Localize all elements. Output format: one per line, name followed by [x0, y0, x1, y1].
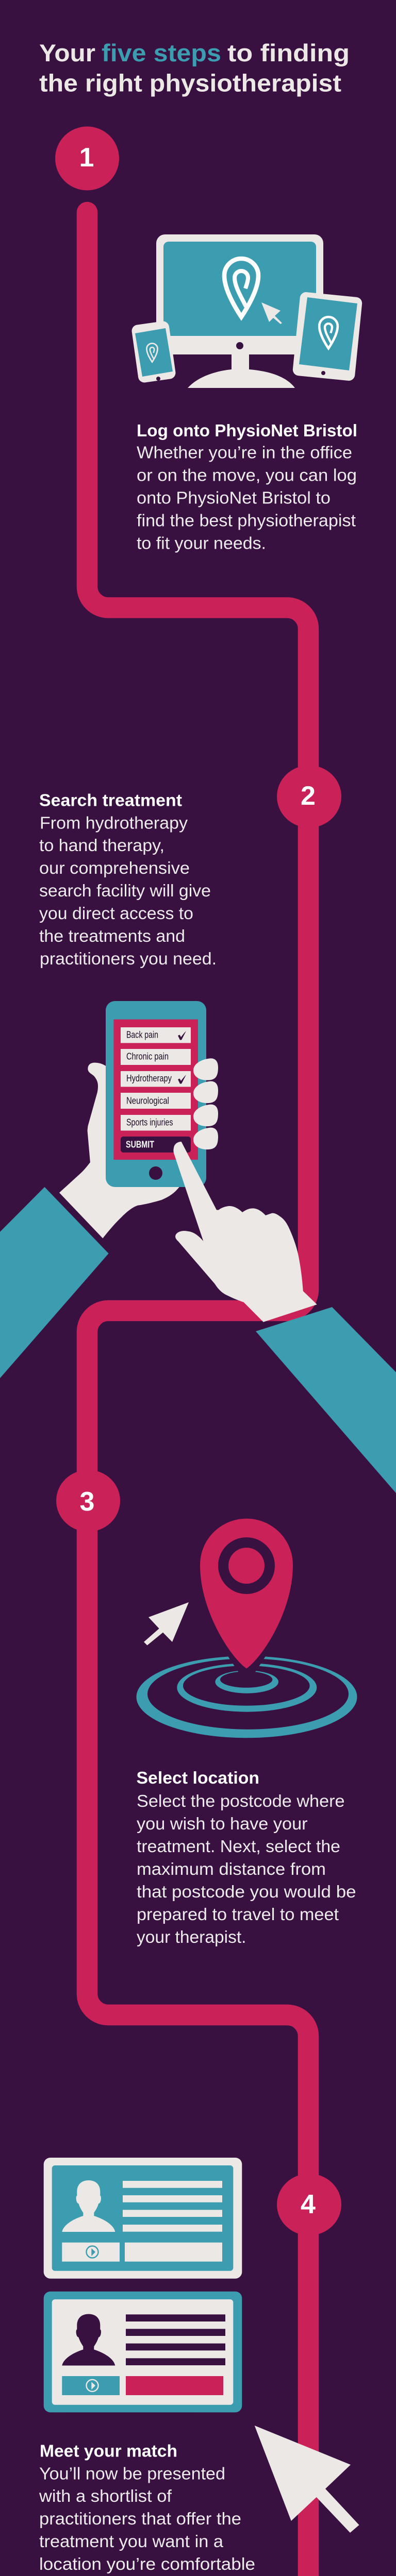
- icon: location pin: [200, 1519, 293, 1669]
- text block: search treatment: From hydrotherapy: [40, 813, 188, 832]
- text block: meet your match: practitioners that offer the: [39, 2509, 241, 2528]
- icon: practitioner card, unselected: [44, 2158, 242, 2279]
- step 2 number badge: [277, 766, 341, 827]
- title: five steps: [102, 39, 221, 66]
- text block: meet your match: You’ll now be presented: [39, 2464, 225, 2483]
- icon: monitor, tablet and phone showing the location pin: [131, 234, 362, 388]
- icon: phone with search form: Back pain: [126, 1030, 158, 1040]
- text block: search treatment: our comprehensive: [39, 858, 190, 877]
- timeline path connecting the steps: [87, 212, 308, 2576]
- title: to finding: [227, 39, 350, 66]
- icon: phone with search form: Neurological: [126, 1095, 169, 1106]
- text block: log onto PhysioNet Bristol: or on the move, you can log: [137, 466, 357, 485]
- panel: step 1: [55, 127, 362, 553]
- icon: phone with search form: [106, 1001, 206, 1187]
- text block: select location: prepared to travel to meet: [137, 1905, 339, 1924]
- text block: select location: that postcode you would be: [137, 1882, 356, 1901]
- text block: select location: [136, 1768, 356, 1946]
- title: the right physiotherapist: [39, 69, 341, 97]
- text block: meet your match: treatment you want in a: [39, 2532, 224, 2551]
- icon: right sleeve: [256, 1307, 396, 1493]
- icon: right hand pointing at submit: [173, 1142, 317, 1322]
- step 2 number badge: 2: [301, 781, 316, 811]
- panel: step 3: [56, 1470, 357, 1946]
- text block: select location: your therapist.: [137, 1927, 246, 1946]
- text block: log onto PhysioNet Bristol: Log onto PhysioNet Bristol: [137, 421, 357, 440]
- title: [39, 39, 350, 97]
- text block: meet your match: [39, 2441, 255, 2576]
- step 4 number badge: 4: [301, 2190, 316, 2219]
- icon: phone with search form: SUBMIT: [126, 1140, 154, 1150]
- icon: left sleeve: [0, 1187, 109, 1378]
- text block: select location: you wish to have your: [137, 1814, 308, 1833]
- step 1 number badge: [55, 127, 119, 191]
- icon: large cursor arrow: [255, 2426, 359, 2533]
- text block: meet your match: Meet your match: [40, 2441, 177, 2461]
- panel: step 4: [39, 2158, 359, 2576]
- text block: search treatment: search facility will give: [39, 881, 211, 900]
- icon: target rings under pin: [136, 1646, 357, 1738]
- text block: search treatment: you direct access to: [39, 904, 193, 923]
- step 4 number badge: [277, 2174, 341, 2235]
- icon: cursor arrow: [144, 1602, 189, 1646]
- icon: phone with search form: Hydrotherapy: [126, 1073, 172, 1083]
- text block: log onto PhysioNet Bristol: onto PhysioNet Bristol to: [137, 488, 331, 507]
- text block: select location: Select the postcode where: [137, 1791, 345, 1810]
- text block: search treatment: practitioners you need.: [40, 949, 217, 968]
- text block: select location: maximum distance from: [137, 1859, 326, 1878]
- icon: phone with search form: Chronic pain: [126, 1052, 169, 1062]
- step 3 number badge: [56, 1470, 120, 1532]
- icon: left hand holding phone: [59, 1063, 180, 1239]
- text block: select location: treatment. Next, select the: [137, 1837, 340, 1856]
- icon: phone with search form: Sports injuries: [126, 1117, 173, 1127]
- text block: log onto PhysioNet Bristol: to fit your needs.: [137, 534, 266, 553]
- text block: meet your match: with a shortlist of: [39, 2486, 172, 2505]
- text block: log onto PhysioNet Bristol: find the best physiotherapist: [137, 511, 356, 530]
- text block: search treatment: [39, 790, 217, 968]
- text block: select location: Select location: [136, 1768, 259, 1787]
- text block: search treatment: to hand therapy,: [39, 836, 164, 855]
- step 1 number badge: 1: [79, 143, 94, 173]
- panel: step 2: [0, 766, 396, 1493]
- text block: log onto PhysioNet Bristol: Whether you’re in the office: [137, 443, 352, 462]
- title: Your: [39, 39, 95, 66]
- text block: meet your match: location you’re comfortable: [39, 2554, 255, 2573]
- icon: practitioner card, selected: [44, 2292, 242, 2412]
- icon: fingers gripping phone: [193, 1058, 218, 1149]
- text block: search treatment: Search treatment: [39, 790, 182, 809]
- text block: log onto PhysioNet Bristol: [137, 421, 357, 553]
- illustration: hands using the phone search form: [0, 1001, 396, 1493]
- step 3 number badge: 3: [80, 1487, 94, 1517]
- text block: search treatment: the treatments and: [39, 926, 185, 945]
